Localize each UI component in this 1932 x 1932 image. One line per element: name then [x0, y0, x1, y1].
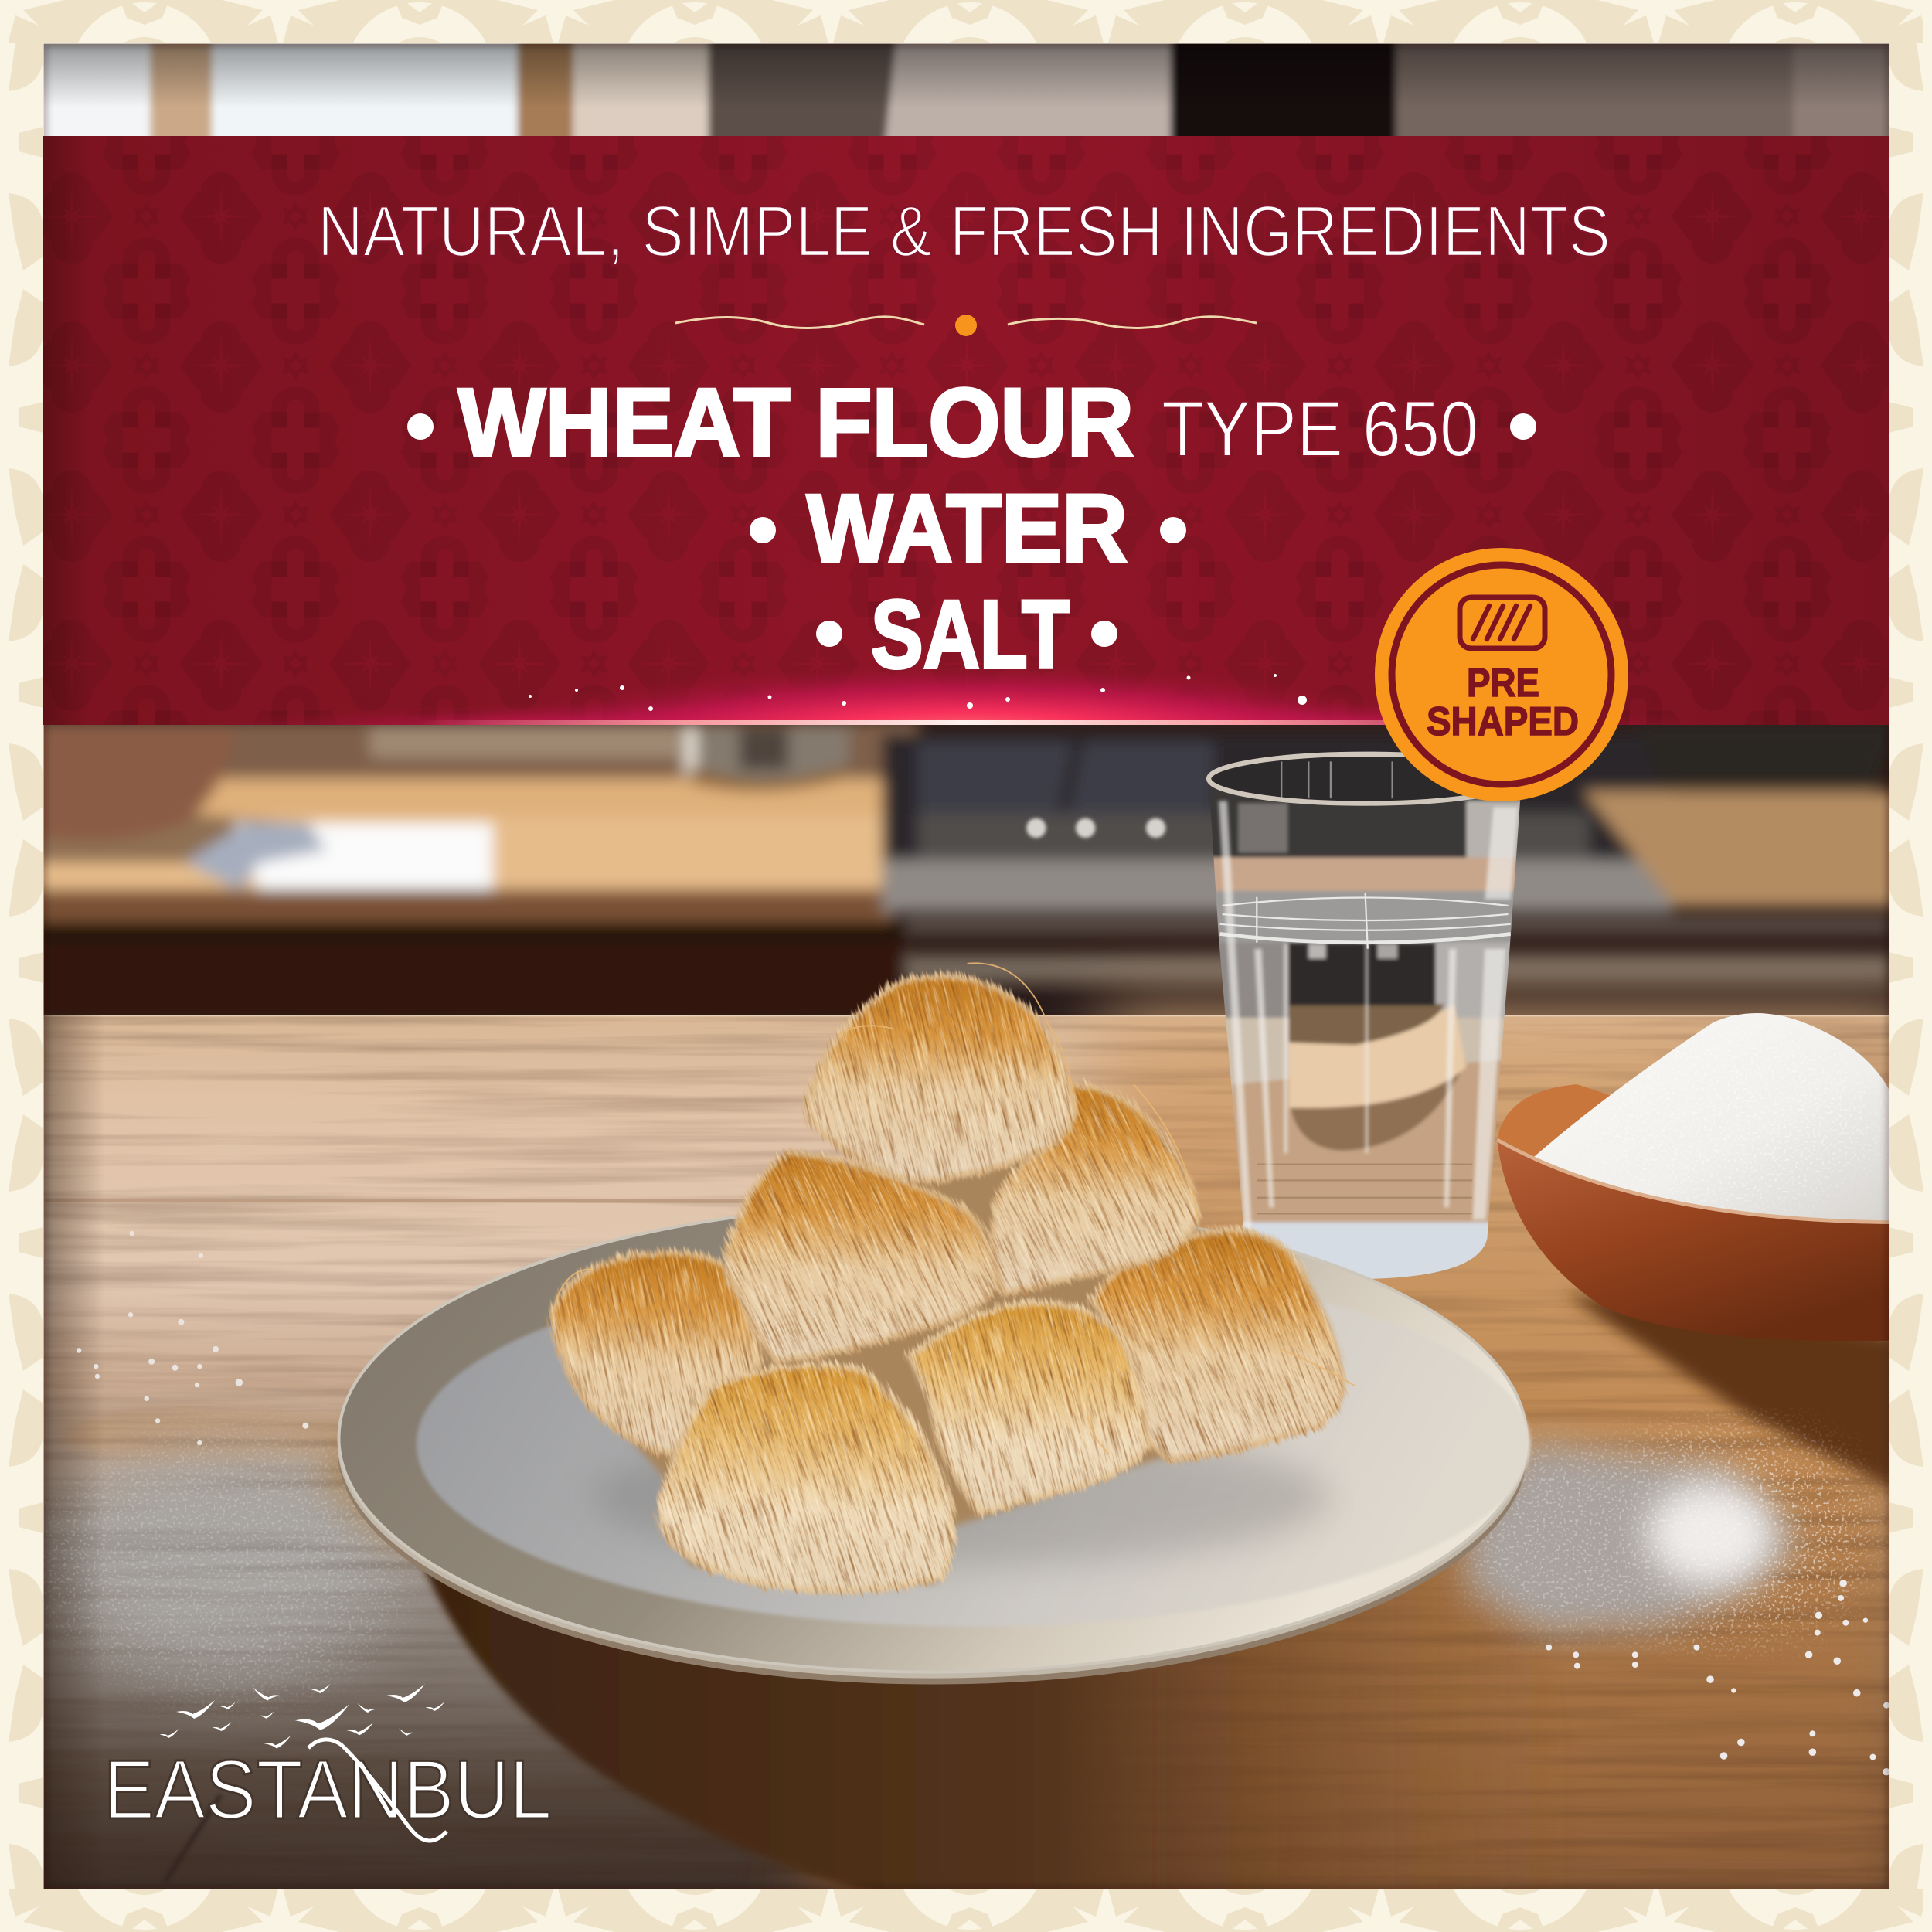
horizon glow: [155, 663, 1777, 802]
glass of water: [1196, 740, 1540, 1306]
back wall left: [31, 721, 918, 780]
tan base of water: [1232, 1060, 1503, 1232]
badge: pre shaped: SHAPED: [1427, 699, 1579, 744]
floor board crack: [165, 1795, 220, 1882]
salt bowl: [1497, 1013, 1891, 1341]
steel pot: [678, 727, 850, 787]
stray strands: [552, 963, 1355, 1454]
badge text: PRE: [1467, 661, 1539, 706]
badge: pre shaped: [1375, 548, 1628, 801]
oven handle bands: [906, 918, 1891, 933]
salt mound: [1526, 1013, 1891, 1223]
stove control panel: [883, 860, 1673, 912]
wordmark: EASTANBUL: [104, 1743, 552, 1837]
icon: oven tray: [1460, 597, 1545, 648]
ingredient: wheat flour: WHEAT FLOUR: [458, 369, 1134, 477]
lower cabinet: [31, 923, 906, 1022]
plate: [338, 1204, 1530, 1685]
bundle: left front: [593, 1279, 1019, 1677]
dark reflection: [1289, 941, 1435, 1005]
counter white reflection: [234, 823, 493, 889]
salt grains right: [1546, 1580, 1890, 1776]
shaded counter under bowl: [31, 813, 296, 862]
peach band above water: [1196, 858, 1540, 891]
bowl inner rim: [1497, 1084, 1651, 1183]
kadayif bundle stack: [512, 913, 1423, 1677]
bundle: right: [1011, 1143, 1423, 1548]
brown reflection: [1289, 1004, 1444, 1045]
bundle: middle right: [912, 1005, 1278, 1372]
bundle: centre front: [857, 1244, 1199, 1572]
glass contents: [1196, 740, 1540, 1306]
vertical glass streaks: [1219, 801, 1518, 1232]
heading: natural simple and fresh ingredients: NATURAL, SIMPLE & FRESH INGREDIENTS: [318, 191, 1611, 271]
stack underlay: [566, 1109, 1337, 1583]
left vignette: [43, 1015, 105, 1893]
flock of birds: [159, 1684, 445, 1748]
panel: red ingredients banner: [43, 136, 1889, 802]
blurred kitchen background: [31, 721, 1897, 1022]
bowl at left: [31, 727, 234, 840]
flour haze left: [62, 1460, 394, 1669]
left counter edge: [31, 889, 893, 923]
wordmark swash: [308, 1740, 447, 1841]
empty upper glass: [1196, 770, 1540, 858]
wooden table: [43, 1015, 1922, 1922]
right counter: [1583, 791, 1897, 906]
water surface: [1196, 891, 1540, 943]
bowl shadow: [1565, 1294, 1897, 1491]
ingredient: salt: SALT: [871, 581, 1070, 689]
bundle: top: [759, 913, 1121, 1243]
stove body: [883, 734, 1673, 872]
ingredient: wheat flour: TYPE 650: [1162, 385, 1478, 473]
upper water sides: [1196, 941, 1294, 1018]
peach reflection: [1289, 1004, 1466, 1108]
plate cast shadow: [413, 1478, 1602, 1897]
ornamental divider: [675, 315, 1257, 336]
warm right wood: [801, 1015, 1922, 1922]
glass rim: [1209, 754, 1522, 804]
salt mound grain: [1565, 1016, 1885, 1213]
flour spill right: [1466, 1430, 1872, 1639]
glass base: [1232, 1223, 1503, 1284]
left counter top: [43, 804, 897, 903]
right pot: [1639, 725, 1897, 788]
stove knobs: [1026, 818, 1165, 838]
bundle: middle left: [645, 1048, 1076, 1465]
flour texture left: [43, 1430, 413, 1700]
bowl body: [1497, 1140, 1891, 1341]
ingredient: wheat flour: [407, 369, 1536, 477]
water drops left: [77, 1231, 308, 1445]
brown lower reflection: [1289, 1060, 1466, 1151]
window strip at top: [43, 43, 1889, 136]
warm wood patch left: [321, 1411, 493, 1546]
ingredient: water: WATER: [807, 475, 1128, 583]
burner grates: [918, 742, 1213, 813]
bundle: far left: [512, 1210, 802, 1495]
sparkles: [529, 674, 1307, 711]
logo: eastanbul: [104, 1684, 552, 1841]
